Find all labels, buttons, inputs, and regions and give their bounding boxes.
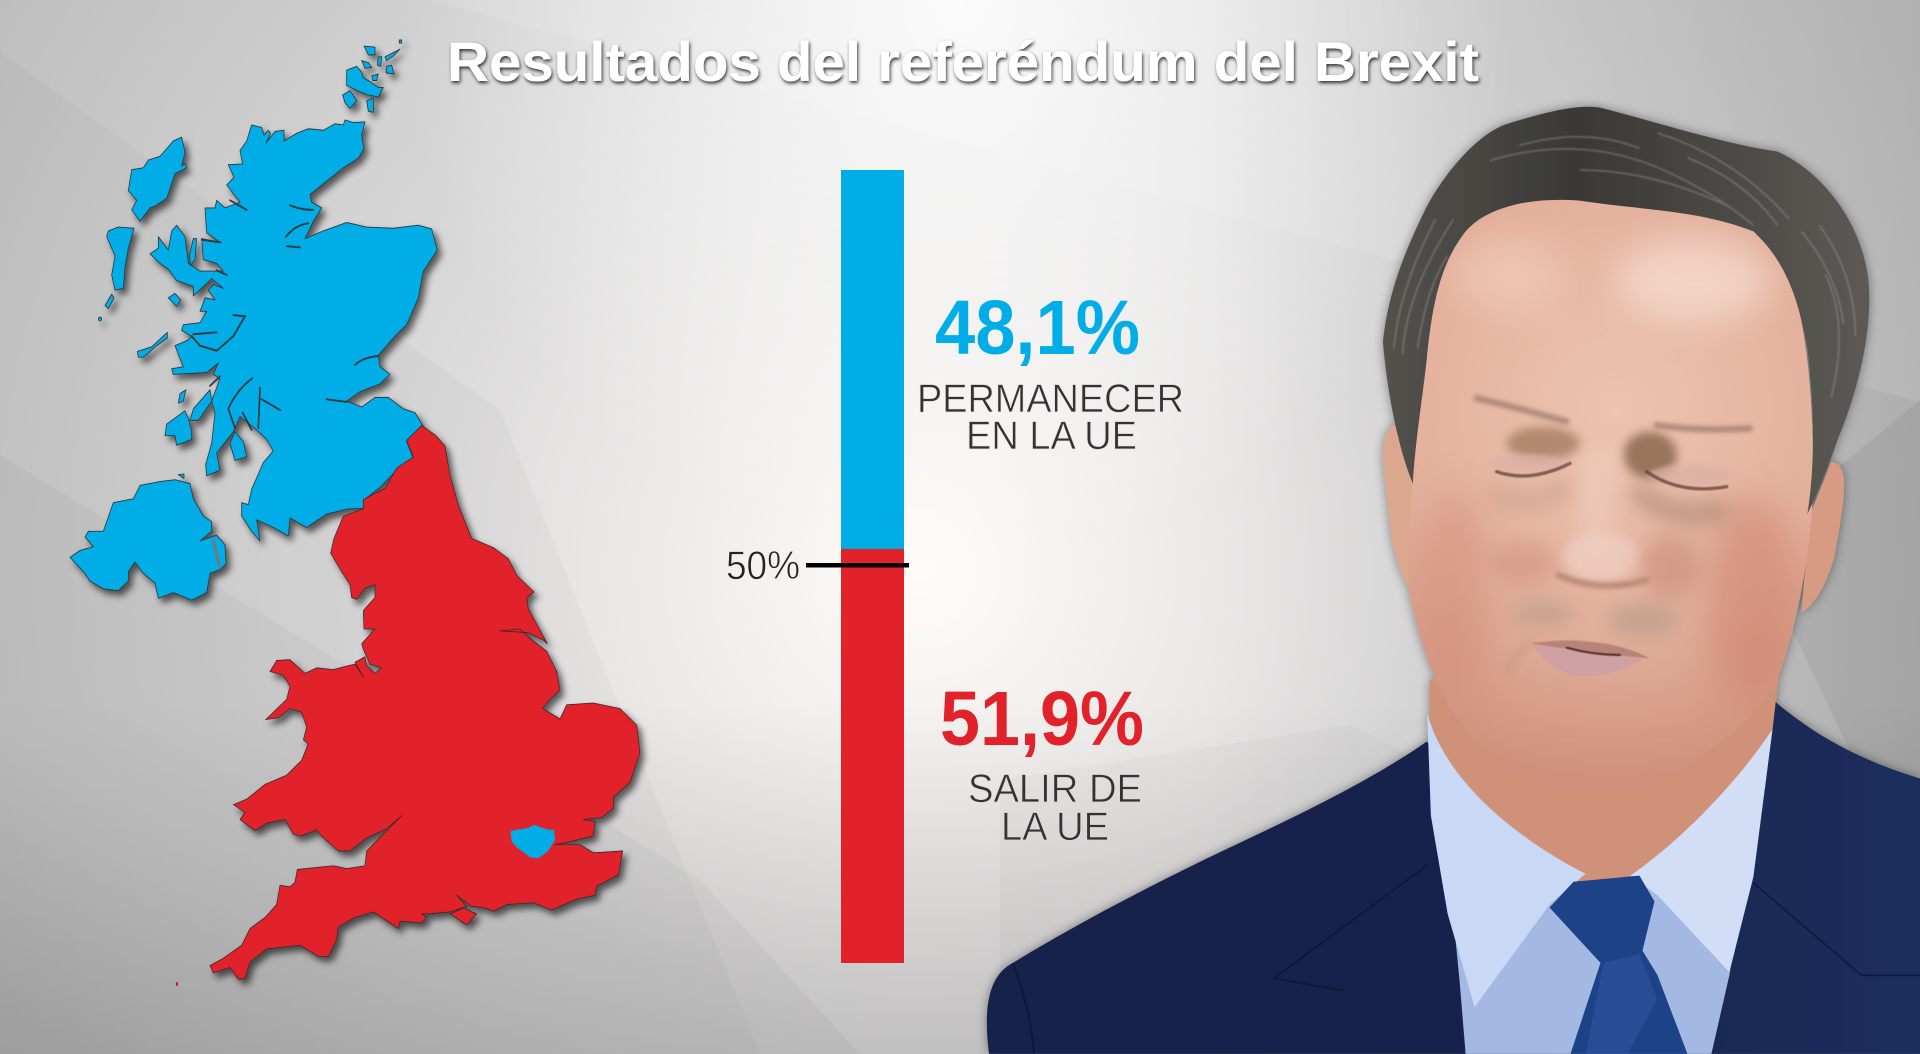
Scotland and islands [98, 40, 437, 541]
hair [1383, 107, 1869, 514]
under eye right [1640, 493, 1720, 514]
portrait of man in suit [987, 107, 1920, 1054]
remain label: PERMANECER [917, 377, 1184, 421]
Isle of Wight [450, 908, 477, 925]
forehead and cheek shading [1418, 238, 1801, 797]
shirt [1448, 858, 1747, 1054]
London [511, 825, 555, 858]
facial features [1477, 398, 1750, 676]
eye socket right [1623, 432, 1677, 478]
result bar [806, 170, 909, 963]
ear left [1383, 425, 1413, 588]
map inlet shading [192, 200, 378, 566]
corner crease [1508, 643, 1530, 673]
lapel lines [1013, 866, 1920, 1054]
England and Wales [210, 426, 640, 979]
leave label [968, 767, 1142, 849]
eyelid right [1648, 464, 1732, 486]
jacket [987, 699, 1920, 1054]
leave label: SALIR DE [968, 767, 1142, 811]
stubble right [1607, 603, 1680, 637]
lashes left [1497, 463, 1570, 476]
lashes right [1647, 472, 1727, 489]
tie highlight [1586, 954, 1657, 1054]
bar: leave [841, 549, 904, 963]
hair mass [1383, 107, 1869, 514]
UK map [70, 40, 640, 979]
50% label: 50% [726, 544, 800, 588]
leave label: LA UE [1001, 805, 1109, 849]
remain label [917, 377, 1184, 458]
collar left [1427, 714, 1586, 1007]
nasal fold right [1640, 533, 1700, 600]
remain value: 48,1% [935, 285, 1140, 371]
upper lip [1530, 640, 1650, 658]
50% marker line [806, 563, 909, 568]
collar right [1630, 729, 1773, 972]
brow right [1657, 425, 1750, 429]
eyelid left [1487, 454, 1567, 473]
eye socket left [1507, 427, 1580, 460]
remain label: EN LA UE [966, 414, 1137, 458]
nasal fold left [1490, 540, 1557, 587]
face [1408, 188, 1813, 791]
nose bridge highlight [1596, 463, 1600, 557]
nose underside [1558, 575, 1647, 586]
neck [1430, 662, 1780, 889]
tie [1550, 876, 1687, 1054]
Northern Ireland [70, 480, 226, 600]
stubble left [1510, 600, 1577, 627]
lower lip [1533, 645, 1643, 676]
nose tip [1562, 533, 1642, 580]
ear right [1801, 462, 1844, 612]
stray islet [176, 982, 178, 986]
title: Resultados del referéndum del Brexit [447, 30, 1479, 93]
mouth line [1567, 648, 1620, 655]
brow left [1477, 398, 1567, 422]
hair highlights [1394, 133, 1855, 397]
bar: remain [841, 170, 904, 549]
leave value: 51,9% [940, 676, 1144, 762]
under eye left [1497, 487, 1567, 502]
body and head [987, 188, 1920, 1054]
